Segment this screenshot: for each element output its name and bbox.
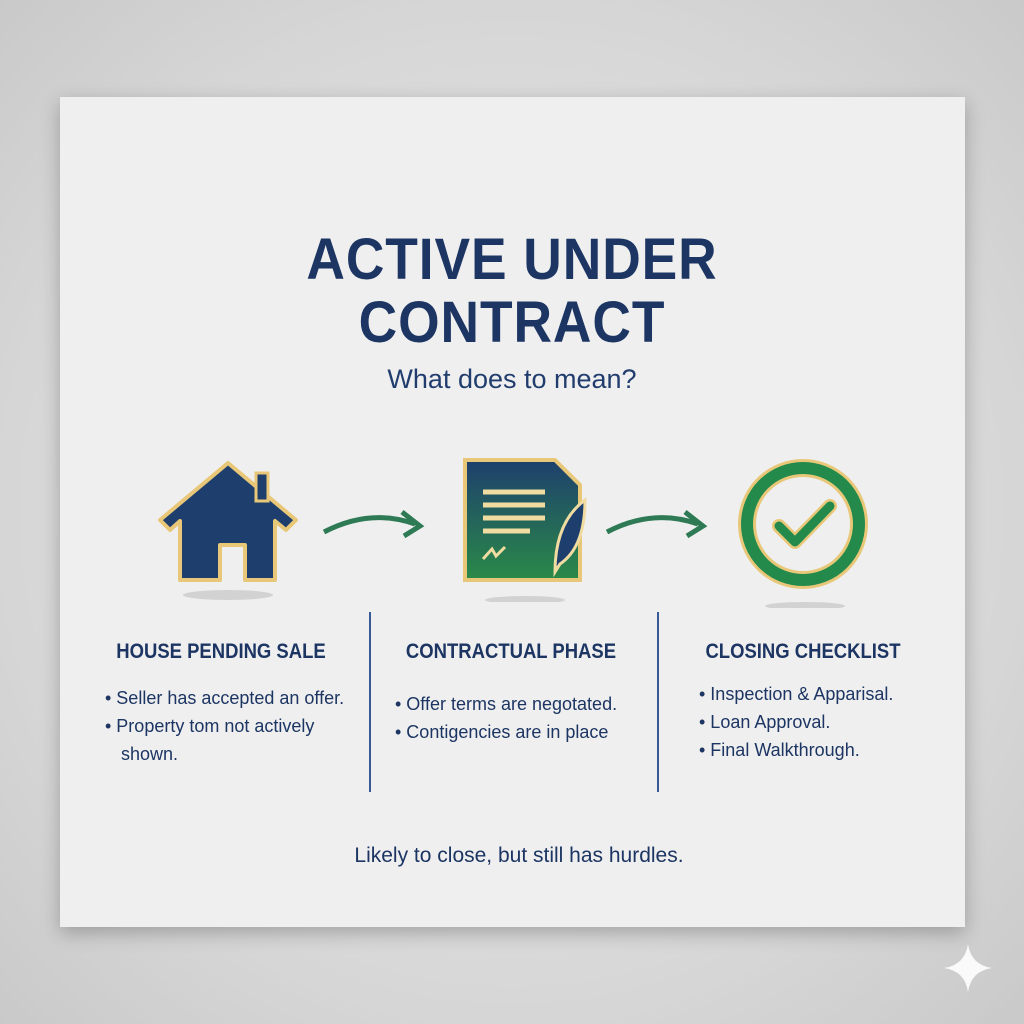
- title: ACTIVE UNDER: [306, 227, 718, 292]
- column 3 bullets: • Loan Approval.: [699, 712, 830, 732]
- divider 2: [657, 612, 659, 792]
- divider 1: [369, 612, 371, 792]
- icon: check circle: [738, 459, 868, 608]
- column 1 heading: HOUSE PENDING SALE: [116, 640, 326, 663]
- column 1 bullets: • Property tom not actively shown.: [105, 716, 314, 764]
- title: CONTRACT: [359, 290, 665, 355]
- card panel: [60, 97, 965, 927]
- icon: contract document: [463, 458, 586, 602]
- column 1 bullets: [105, 688, 344, 764]
- arrow 1: [322, 510, 424, 538]
- column 2 bullets: • Contigencies are in place: [395, 722, 608, 742]
- column 2 bullets: [395, 694, 617, 742]
- column 1 bullets: • Seller has accepted an offer.: [105, 688, 344, 708]
- icon: sparkle: [944, 944, 992, 992]
- footer note: Likely to close, but still has hurdles.: [354, 844, 684, 867]
- title: [306, 227, 718, 355]
- column 3 bullets: [699, 684, 893, 760]
- column 3 bullets: • Final Walkthrough.: [699, 740, 860, 760]
- column 3 bullets: • Inspection & Apparisal.: [699, 684, 893, 704]
- icon: house: [158, 460, 298, 600]
- arrow 2: [606, 510, 708, 538]
- subtitle: What does to mean?: [387, 364, 637, 394]
- column 2 bullets: • Offer terms are negotated.: [395, 694, 617, 714]
- column 3 heading: CLOSING CHECKLIST: [705, 640, 901, 663]
- column 2 heading: CONTRACTUAL PHASE: [406, 640, 616, 663]
